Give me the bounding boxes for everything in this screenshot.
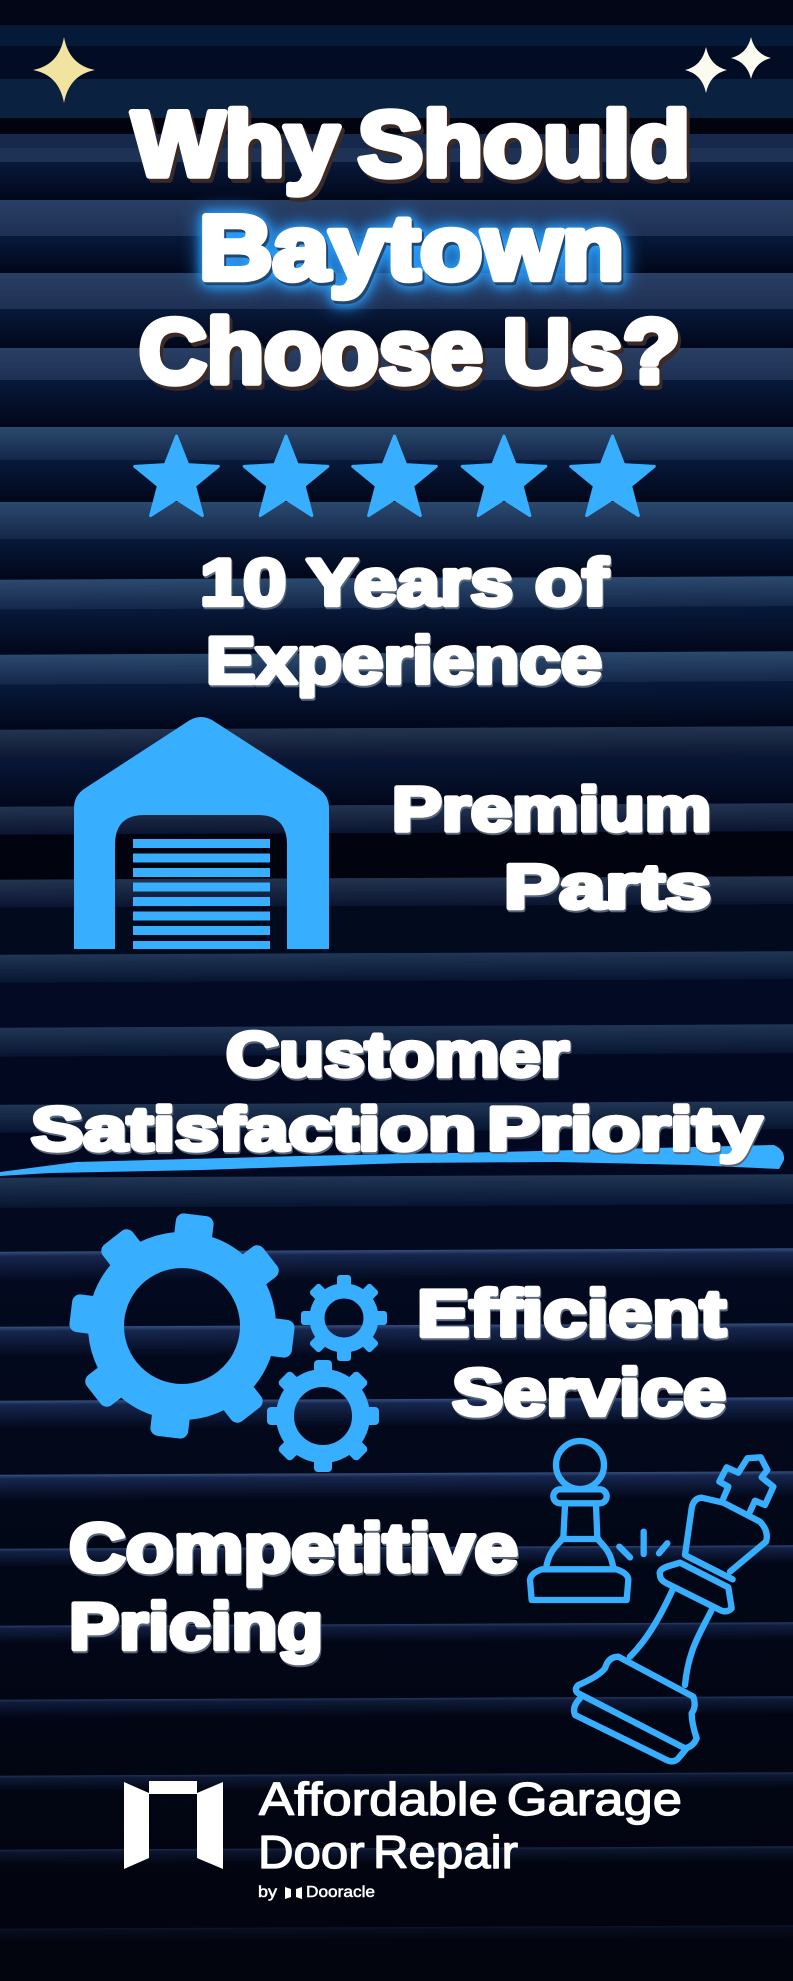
heading: Efficient Service: [417, 1276, 726, 1429]
heading: Competitive Pricing: Pricing: [69, 1589, 323, 1663]
five star rating: [135, 436, 654, 516]
title line: Why Should: Why Should: [132, 94, 690, 196]
by Dooracle line: by: [258, 1884, 277, 1901]
footer brand name: [258, 1773, 682, 1901]
icon: large gear: [69, 1213, 295, 1439]
heading: Premium Parts: Parts: [504, 853, 711, 922]
footer logo mark: [124, 1781, 223, 1869]
icon: garage: [74, 717, 329, 949]
heading: 10 Years of Experience: 10 Years of: [200, 545, 609, 619]
title: [132, 94, 690, 402]
heading: Efficient Service: Service: [452, 1355, 726, 1429]
by Dooracle line: [258, 1884, 375, 1901]
decorative brush underline: [0, 1145, 784, 1176]
heading: Competitive Pricing: [69, 1510, 518, 1663]
icon: chess pawn and toppled king: [530, 1441, 773, 1761]
title line: Choose Us?: Choose Us?: [139, 302, 680, 402]
heading: Premium Parts: Premium: [392, 776, 711, 844]
heading: Customer Satisfaction Priority: Satisfaction Priority: [31, 1095, 762, 1163]
by Dooracle line: Dooracle: [306, 1884, 375, 1901]
impact marks: [619, 1532, 667, 1557]
heading: Competitive Pricing: Competitive: [69, 1510, 518, 1586]
icon: yellow sparkle: [33, 37, 95, 103]
heading: Customer Satisfaction Priority: [31, 1020, 762, 1163]
toppled king: [574, 1457, 773, 1761]
heading: 10 Years of Experience: Experience: [206, 623, 602, 697]
icon: small gear top: [301, 1275, 387, 1361]
heading: Premium Parts: [392, 776, 711, 922]
icon: white sparkle left: [685, 47, 727, 93]
icon: small gear bottom: [267, 1360, 379, 1472]
title line: Baytown (glowing): Baytown: [199, 198, 624, 299]
heading: Customer Satisfaction Priority: Customer: [226, 1020, 569, 1090]
pawn: [530, 1441, 628, 1600]
heading: 10 Years of Experience: [200, 545, 609, 697]
footer brand name: Door Repair: [258, 1826, 518, 1878]
heading: Efficient Service: Efficient: [417, 1276, 726, 1350]
footer brand name: Affordable Garage: [259, 1773, 682, 1825]
icon: white sparkle right: [731, 37, 771, 79]
